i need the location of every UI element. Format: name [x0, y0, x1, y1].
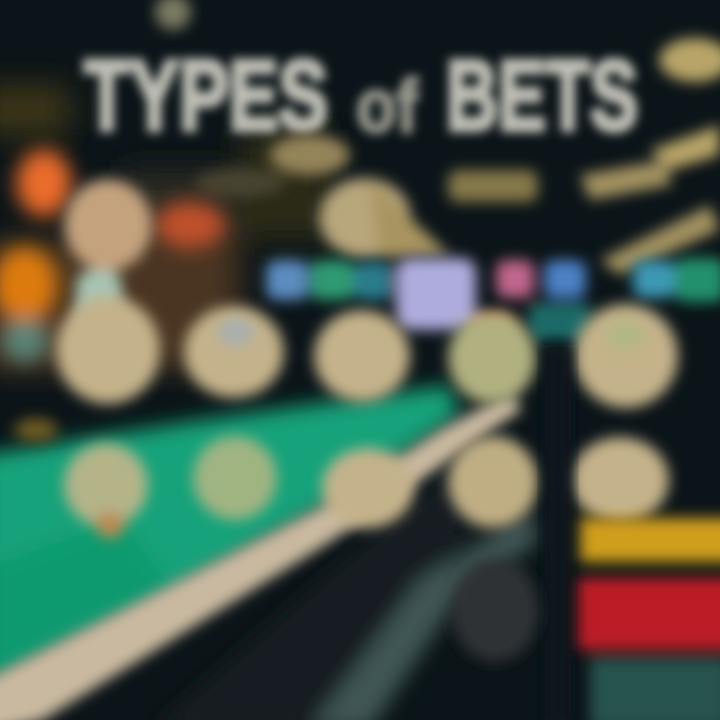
small accent dots — [14, 318, 643, 442]
row 1 of bet circles — [56, 296, 678, 408]
title: TYPES — [84, 40, 328, 152]
title — [84, 40, 638, 152]
person figure — [64, 179, 152, 330]
panel: striped bottom right — [451, 518, 720, 720]
rail shadow — [150, 425, 540, 720]
left colored icons — [0, 149, 226, 362]
table rail — [0, 392, 522, 720]
colored strip of icons — [266, 258, 720, 350]
title: BETS — [446, 40, 638, 152]
large gold wedge — [319, 178, 450, 258]
top icon — [155, 0, 191, 30]
vertical dark pole — [545, 345, 571, 720]
background glow: left venue — [0, 85, 330, 370]
panel: green betting table — [0, 385, 460, 690]
title: of — [356, 64, 419, 149]
row 2 of bet circles — [64, 436, 669, 538]
gold decorative labels — [195, 38, 720, 275]
